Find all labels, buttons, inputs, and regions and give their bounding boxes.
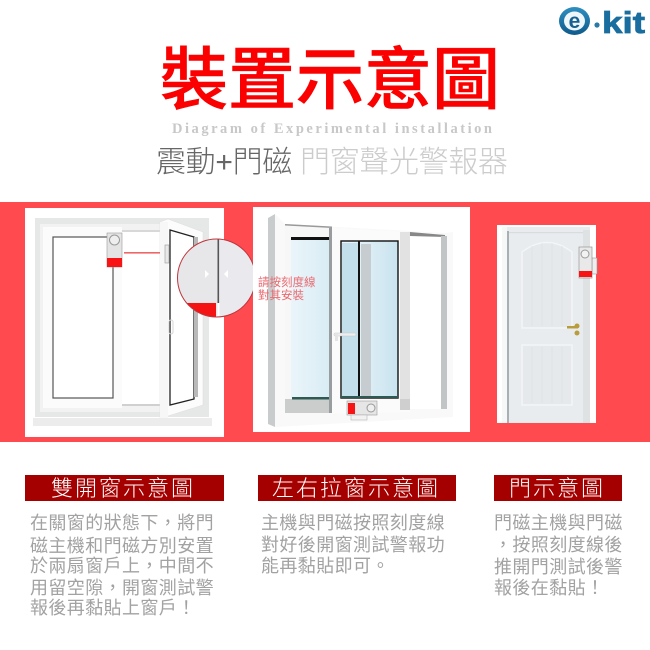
lower door panel (522, 345, 572, 405)
logo: e-kit: kit (602, 5, 645, 40)
callout: magnified alignment marks (177, 238, 253, 318)
subtitle: English: Diagram of Experimental installation (172, 121, 492, 137)
logo: e-kit (559, 5, 645, 40)
open right sash (160, 219, 203, 418)
heading bar: door: 門示意圖 (509, 476, 605, 501)
text block: sliding window: 對好後開窗測試警報功 (261, 535, 445, 555)
callout note: 請按刻度線 (258, 275, 316, 289)
text block: door: 報後在黏貼！ (494, 578, 604, 598)
text block: door: ，按照刻度線後 (494, 535, 623, 555)
text block: double casement: 報後再黏貼上窗戶！ (30, 598, 196, 618)
right opening (410, 232, 447, 409)
text block: sliding window: 主機與門磁按照刻度線 (261, 513, 445, 533)
heading bar: sliding window: 左右拉窗示意圖 (272, 476, 440, 501)
left pane (285, 224, 332, 413)
text block: door: 推開門測試後警 (494, 557, 623, 577)
text block: double casement: 用留空隙，開窗測試警 (30, 578, 214, 598)
text block: double casement: 磁主機和門磁方別安置 (30, 536, 214, 556)
callout note (258, 275, 316, 302)
callout note: 對其安裝 (258, 288, 304, 302)
heading bar: double casement: 雙開窗示意圖 (51, 476, 195, 501)
alarm device (107, 233, 122, 267)
panel: sliding window (253, 207, 470, 432)
heading bar: double casement (25, 475, 224, 501)
opening (122, 231, 162, 404)
panel: door (497, 225, 597, 423)
upper door panel (522, 242, 572, 328)
title: 裝置示意圖 (160, 42, 500, 118)
panel: double casement window (25, 208, 224, 437)
text block: double casement: 於兩扇窗戶上，中間不 (30, 556, 214, 576)
text block: door: 門磁主機與門磁 (494, 513, 623, 533)
red band (0, 202, 650, 442)
window sill (33, 418, 212, 426)
outer frame (268, 214, 275, 427)
text block: sliding window: 能再黏貼即可。 (261, 556, 390, 576)
alignment line (124, 252, 160, 254)
alarm device (347, 401, 377, 420)
product name: 震動+門磁 門窗聲光警報器 (156, 146, 508, 179)
center sash (332, 228, 410, 414)
alarm device (579, 247, 597, 278)
logo: e-kit: e (569, 10, 580, 33)
window frame (35, 218, 209, 417)
text block: double casement: 在關窗的狀態下，將門 (30, 513, 214, 533)
door handle (567, 324, 580, 336)
left sash (43, 227, 122, 408)
